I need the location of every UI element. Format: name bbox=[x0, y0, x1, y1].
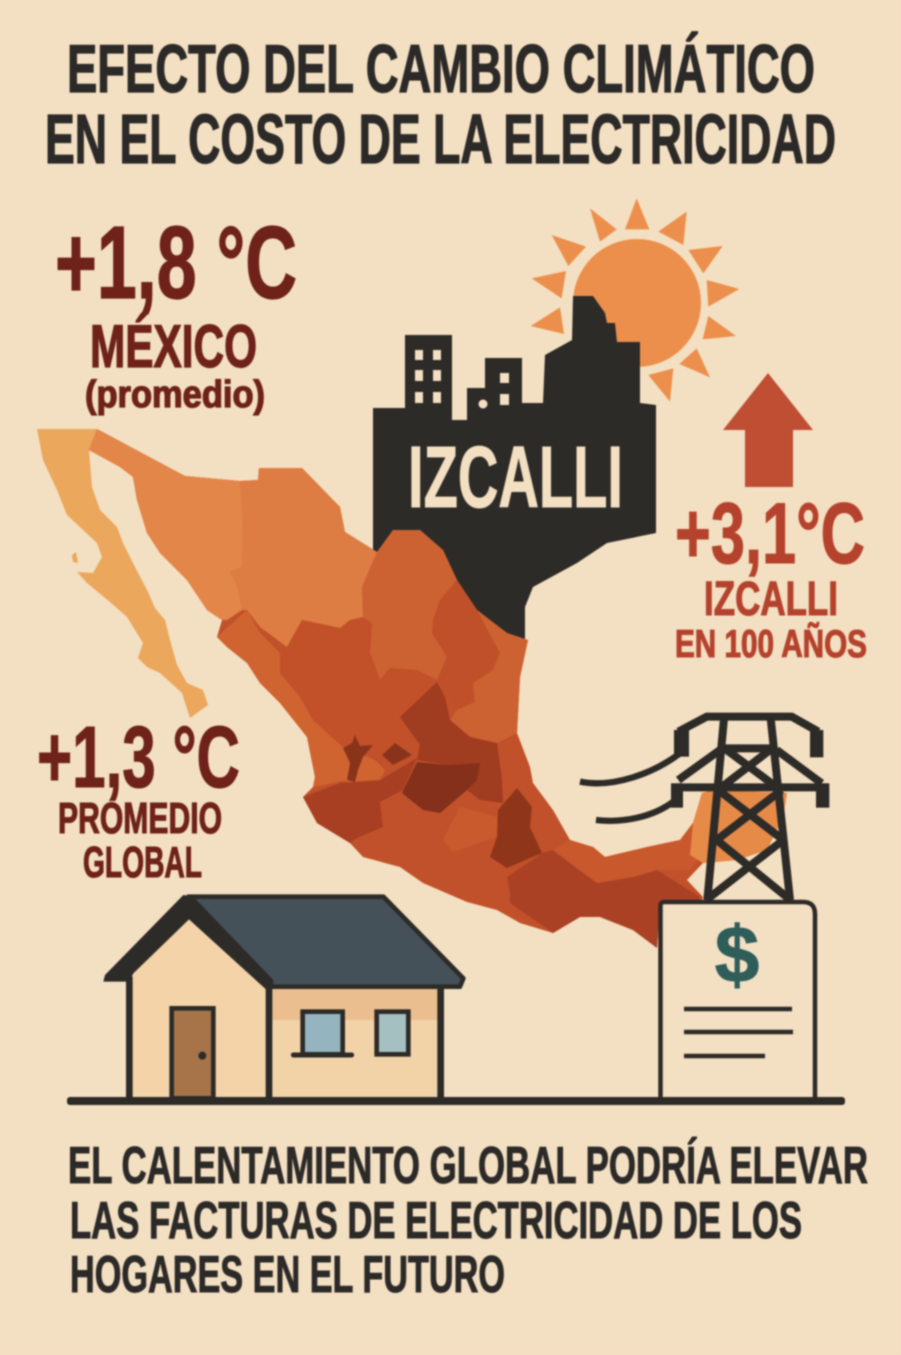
stat: global average temperature: PROMEDIO bbox=[58, 794, 222, 843]
stat: Mexico average temperature bbox=[55, 205, 297, 416]
icon: house bbox=[103, 895, 463, 1098]
stat: Mexico average temperature: MÉXICO bbox=[90, 313, 257, 380]
stat: Mexico average temperature: (promedio) bbox=[85, 374, 265, 416]
stat: Mexico average temperature: +1,8 °C bbox=[55, 205, 297, 320]
icon: Izcalli city skyline bbox=[373, 296, 656, 640]
map region: Baja California peninsula bbox=[37, 429, 208, 718]
stat: global average temperature bbox=[37, 709, 240, 887]
ground line bbox=[67, 1097, 845, 1105]
text block: conclusion bbox=[68, 1137, 868, 1304]
stat: Izcalli temperature rise bbox=[675, 486, 867, 666]
arrow: temperature rising bbox=[723, 373, 813, 487]
icon: transmission tower with power lines bbox=[580, 717, 829, 900]
icon: Izcalli city skyline: IZCALLI bbox=[408, 429, 623, 526]
map region: darkest hotspots bbox=[343, 735, 412, 782]
stat: global average temperature: GLOBAL bbox=[83, 838, 202, 887]
stat: Izcalli temperature rise: IZCALLI bbox=[704, 573, 838, 626]
icon: electricity bill bbox=[660, 902, 815, 1101]
text block: conclusion: HOGARES EN EL FUTURO bbox=[70, 1246, 505, 1304]
icon: electricity bill: $ bbox=[715, 910, 759, 999]
icon: sun bbox=[531, 198, 739, 402]
stat: global average temperature: +1,3 °C bbox=[37, 709, 240, 806]
title bbox=[45, 31, 836, 178]
map: Mexico heat choropleth bbox=[37, 429, 787, 948]
map region: mainland states bbox=[89, 429, 787, 948]
